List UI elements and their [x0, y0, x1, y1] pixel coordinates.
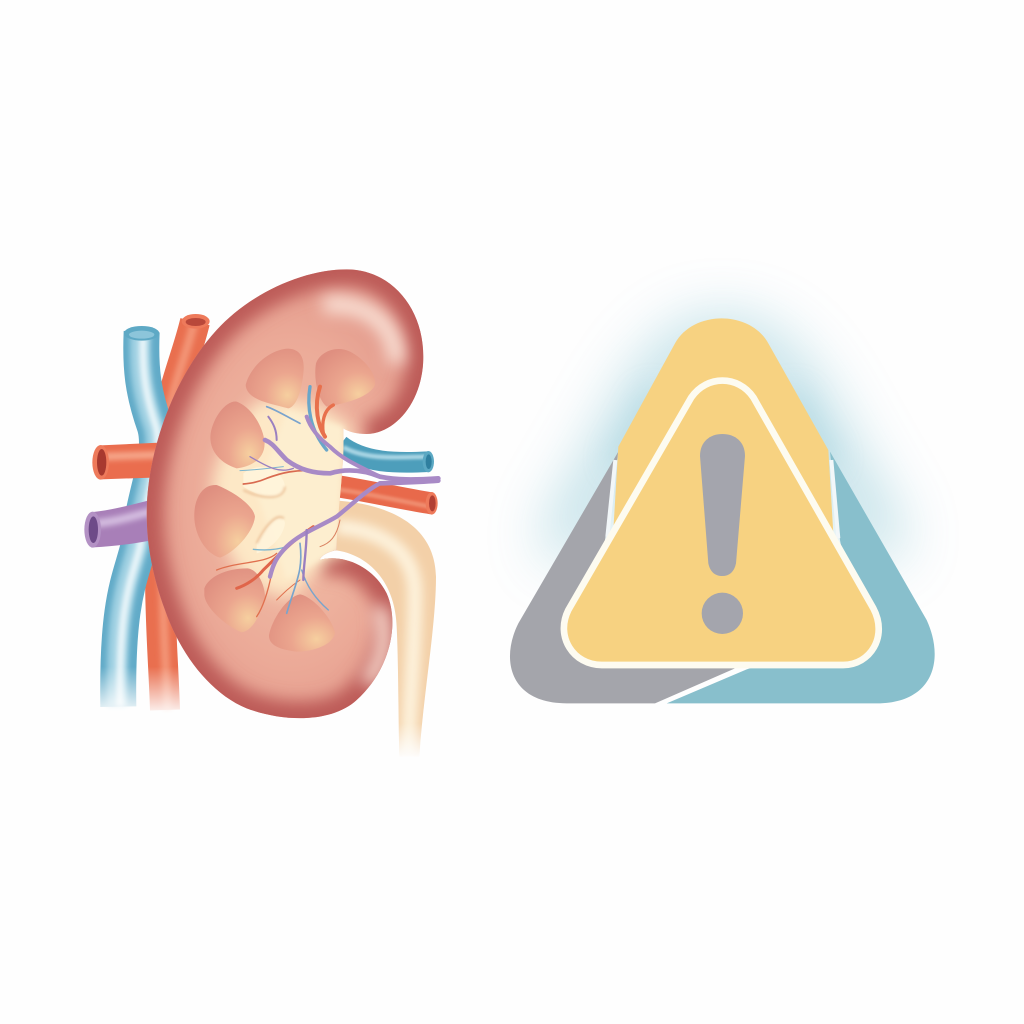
- renal sinus: [213, 399, 350, 597]
- white seams: [607, 460, 838, 538]
- highlights: [323, 304, 397, 363]
- yellow front triangle with white outline: [564, 381, 879, 665]
- pyramid 2: [315, 349, 375, 407]
- teal back shape: [667, 452, 935, 703]
- gray back shape: [510, 452, 735, 703]
- yellow back shape: [613, 318, 833, 533]
- kidney body: [147, 269, 423, 718]
- ureter: [327, 500, 436, 758]
- renal vein, right: [340, 445, 434, 472]
- kidney anatomy illustration: [84, 269, 447, 758]
- artery: aorta: [159, 314, 210, 710]
- renal artery stub, left: [92, 443, 160, 480]
- teal glow: [560, 342, 887, 553]
- vein: inferior vena cava: [117, 326, 159, 707]
- renal vein stub, purple: [84, 498, 157, 548]
- illustration canvas: [84, 269, 935, 754]
- pyramid 6: [269, 594, 335, 652]
- renal vessel branches: [217, 387, 447, 617]
- renal pyramids: [194, 349, 375, 652]
- pyramid 4: [194, 485, 255, 558]
- fade of lower vessels: [90, 667, 197, 717]
- blue branches: [309, 387, 327, 450]
- pyramid 1: [246, 349, 304, 408]
- pyramid 3: [210, 402, 265, 468]
- warning sign: [510, 318, 935, 703]
- exclamation mark: [700, 434, 745, 634]
- purple main trunks: [265, 440, 438, 479]
- renal artery, right: [330, 485, 438, 515]
- pyramid 5: [204, 568, 265, 632]
- sinus folds: [243, 467, 285, 497]
- orange arterial branches: [317, 387, 325, 437]
